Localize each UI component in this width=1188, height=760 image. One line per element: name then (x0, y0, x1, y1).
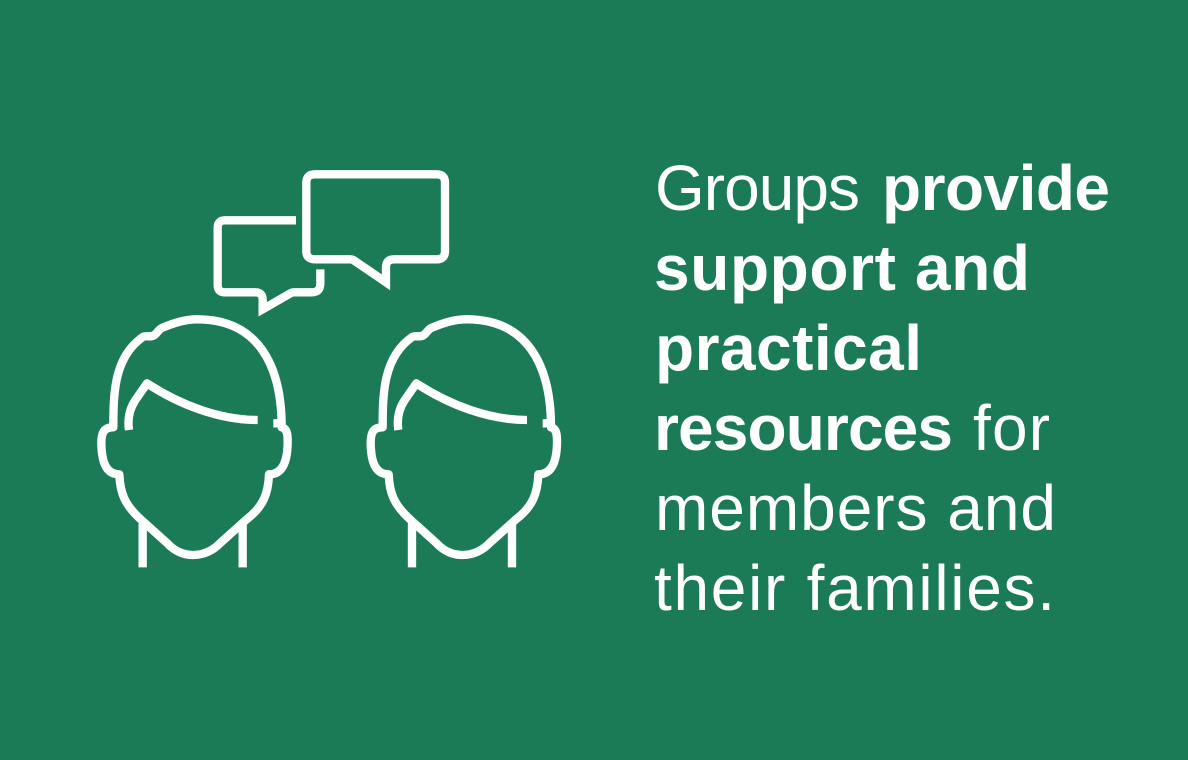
icon: two heads talking with speech bubbles (101, 174, 557, 567)
line 4: for (973, 392, 1050, 464)
hair fringe (398, 383, 527, 430)
head outline with ears (371, 319, 557, 555)
neck left (399, 523, 424, 567)
line 2: support and (654, 232, 1030, 304)
icon: small speech bubble (218, 220, 320, 309)
line 5: members and (655, 472, 1056, 544)
neck right (499, 525, 524, 567)
line 1: Groups (655, 152, 860, 224)
line 1: provide (882, 152, 1110, 224)
neck left (130, 523, 155, 567)
neck right (230, 525, 255, 567)
ear notch (543, 411, 551, 436)
ear notch (273, 411, 282, 436)
icon: large speech bubble (306, 174, 445, 282)
line 3: practical (655, 312, 922, 384)
icon: left head (101, 319, 288, 567)
line 6: their families. (654, 552, 1055, 624)
icon: right head (371, 319, 557, 567)
line 4: resources (654, 392, 953, 464)
head outline with ears (101, 319, 288, 555)
hair fringe (129, 383, 258, 430)
text block: main message (654, 152, 1110, 624)
